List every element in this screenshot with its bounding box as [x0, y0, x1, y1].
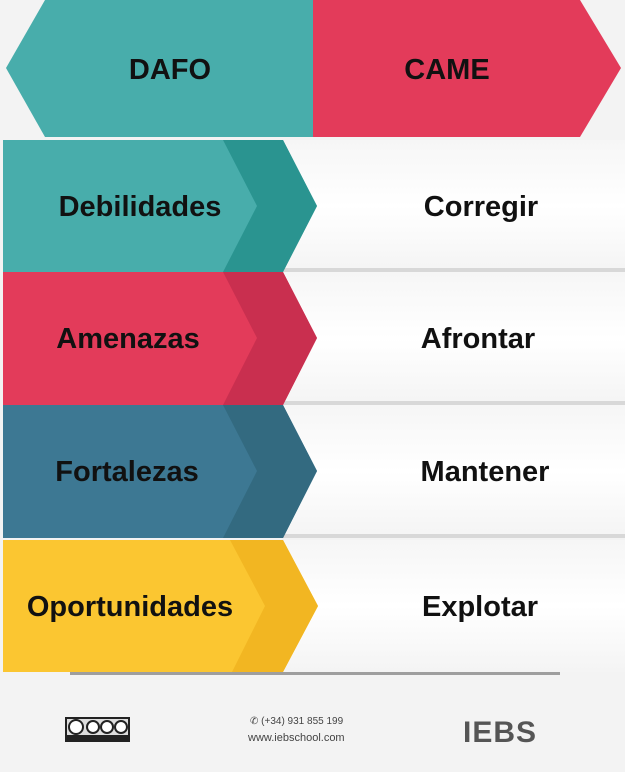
icon: creative commons badge	[65, 717, 130, 742]
contact text	[247, 716, 345, 744]
row: Amenazas / Afrontar: Amenazas	[56, 323, 200, 355]
header right: CAME	[313, 0, 621, 137]
row: Amenazas / Afrontar: Afrontar	[421, 323, 535, 355]
row: Fortalezas / Mantener: Fortalezas	[55, 456, 199, 488]
row: Debilidades / Corregir	[3, 140, 625, 272]
row: Debilidades / Corregir: Corregir	[424, 191, 538, 223]
row: Debilidades / Corregir: Debilidades	[59, 191, 221, 223]
contact text: ✆ (+34) 931 855 199	[250, 716, 344, 727]
header: DAFO / CAME	[6, 0, 621, 137]
row: Fortalezas / Mantener	[3, 405, 625, 538]
row: Fortalezas / Mantener: Mantener	[421, 456, 549, 488]
row: Oportunidades / Explotar: Explotar	[422, 591, 538, 623]
header right: CAME: CAME	[404, 54, 490, 86]
contact text: www.iebschool.com	[247, 732, 345, 744]
footer	[65, 716, 537, 749]
logo: IEBS: IEBS	[463, 716, 537, 749]
row: Amenazas / Afrontar	[3, 272, 625, 405]
row: Oportunidades / Explotar	[3, 540, 625, 675]
header left: DAFO: DAFO	[129, 54, 211, 86]
row: Oportunidades / Explotar: Oportunidades	[27, 591, 233, 623]
header left: DAFO	[6, 0, 313, 137]
